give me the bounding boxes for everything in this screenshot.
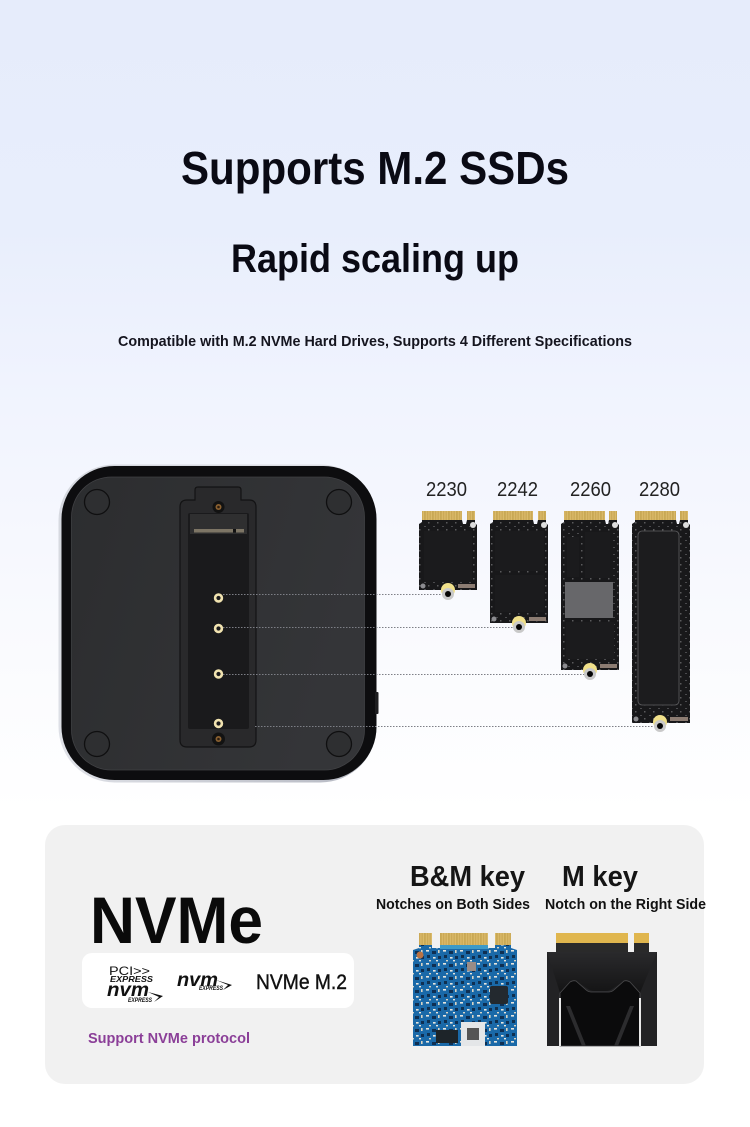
size labels: 2260	[570, 479, 611, 501]
black body	[62, 466, 376, 780]
top screw	[212, 501, 224, 513]
logo strip	[82, 953, 354, 1008]
SSD 2260	[561, 511, 619, 680]
M.2 connector	[190, 514, 247, 534]
logo: PCI Express NVM Express: PCI>>	[109, 964, 150, 978]
logo: NVM Express: nvm	[177, 970, 218, 991]
top face	[72, 477, 364, 770]
subtitle heading: Rapid scaling up	[231, 237, 519, 281]
M caption: Notch on the Right Side	[545, 896, 706, 913]
SSD 2242	[490, 511, 548, 633]
title: Supports M.2 SSDs	[181, 142, 569, 194]
size labels: 2242	[497, 479, 538, 501]
NVMe heading: NVMe	[90, 883, 263, 957]
panel: NVMe and key types	[45, 825, 706, 1084]
logo: NVM Express: EXPRESS	[199, 986, 223, 992]
bay inner board	[188, 513, 249, 729]
NVMe M.2 label: NVMe M.2	[256, 971, 347, 994]
logo: PCI Express NVM Express: EXPRESS	[110, 975, 154, 984]
M.2 bay outline	[180, 487, 256, 747]
bottom screw	[212, 732, 225, 746]
side button	[375, 692, 378, 714]
SSD 2280	[632, 511, 690, 732]
logo: PCI Express NVM Express: nvm	[107, 980, 149, 1001]
M key SSD photo	[547, 933, 657, 1046]
standoffs	[215, 595, 222, 727]
description: Compatible with M.2 NVMe Hard Drives, Supports 4 Different Specifications	[118, 333, 632, 350]
rubber feet	[84, 490, 352, 756]
B&M key heading: B&M key	[410, 861, 525, 893]
size labels: 2280	[639, 479, 680, 501]
B&M key SSD photo	[413, 933, 517, 1046]
logo: PCI Express NVM Express	[107, 964, 163, 1004]
SSD 2230	[419, 511, 477, 600]
B&M caption: Notches on Both Sides	[376, 896, 530, 913]
silver outer rim	[58, 464, 376, 782]
M key heading: M key	[562, 861, 638, 893]
size labels: 2230	[426, 479, 467, 501]
size labels	[426, 479, 680, 501]
logo: PCI Express NVM Express: EXPRESS	[128, 998, 152, 1004]
protocol note: Support NVMe protocol	[88, 1030, 250, 1047]
dotted guide lines	[223, 594, 656, 726]
logo: NVM Express	[177, 970, 232, 992]
device: underside of enclosure	[58, 464, 378, 782]
